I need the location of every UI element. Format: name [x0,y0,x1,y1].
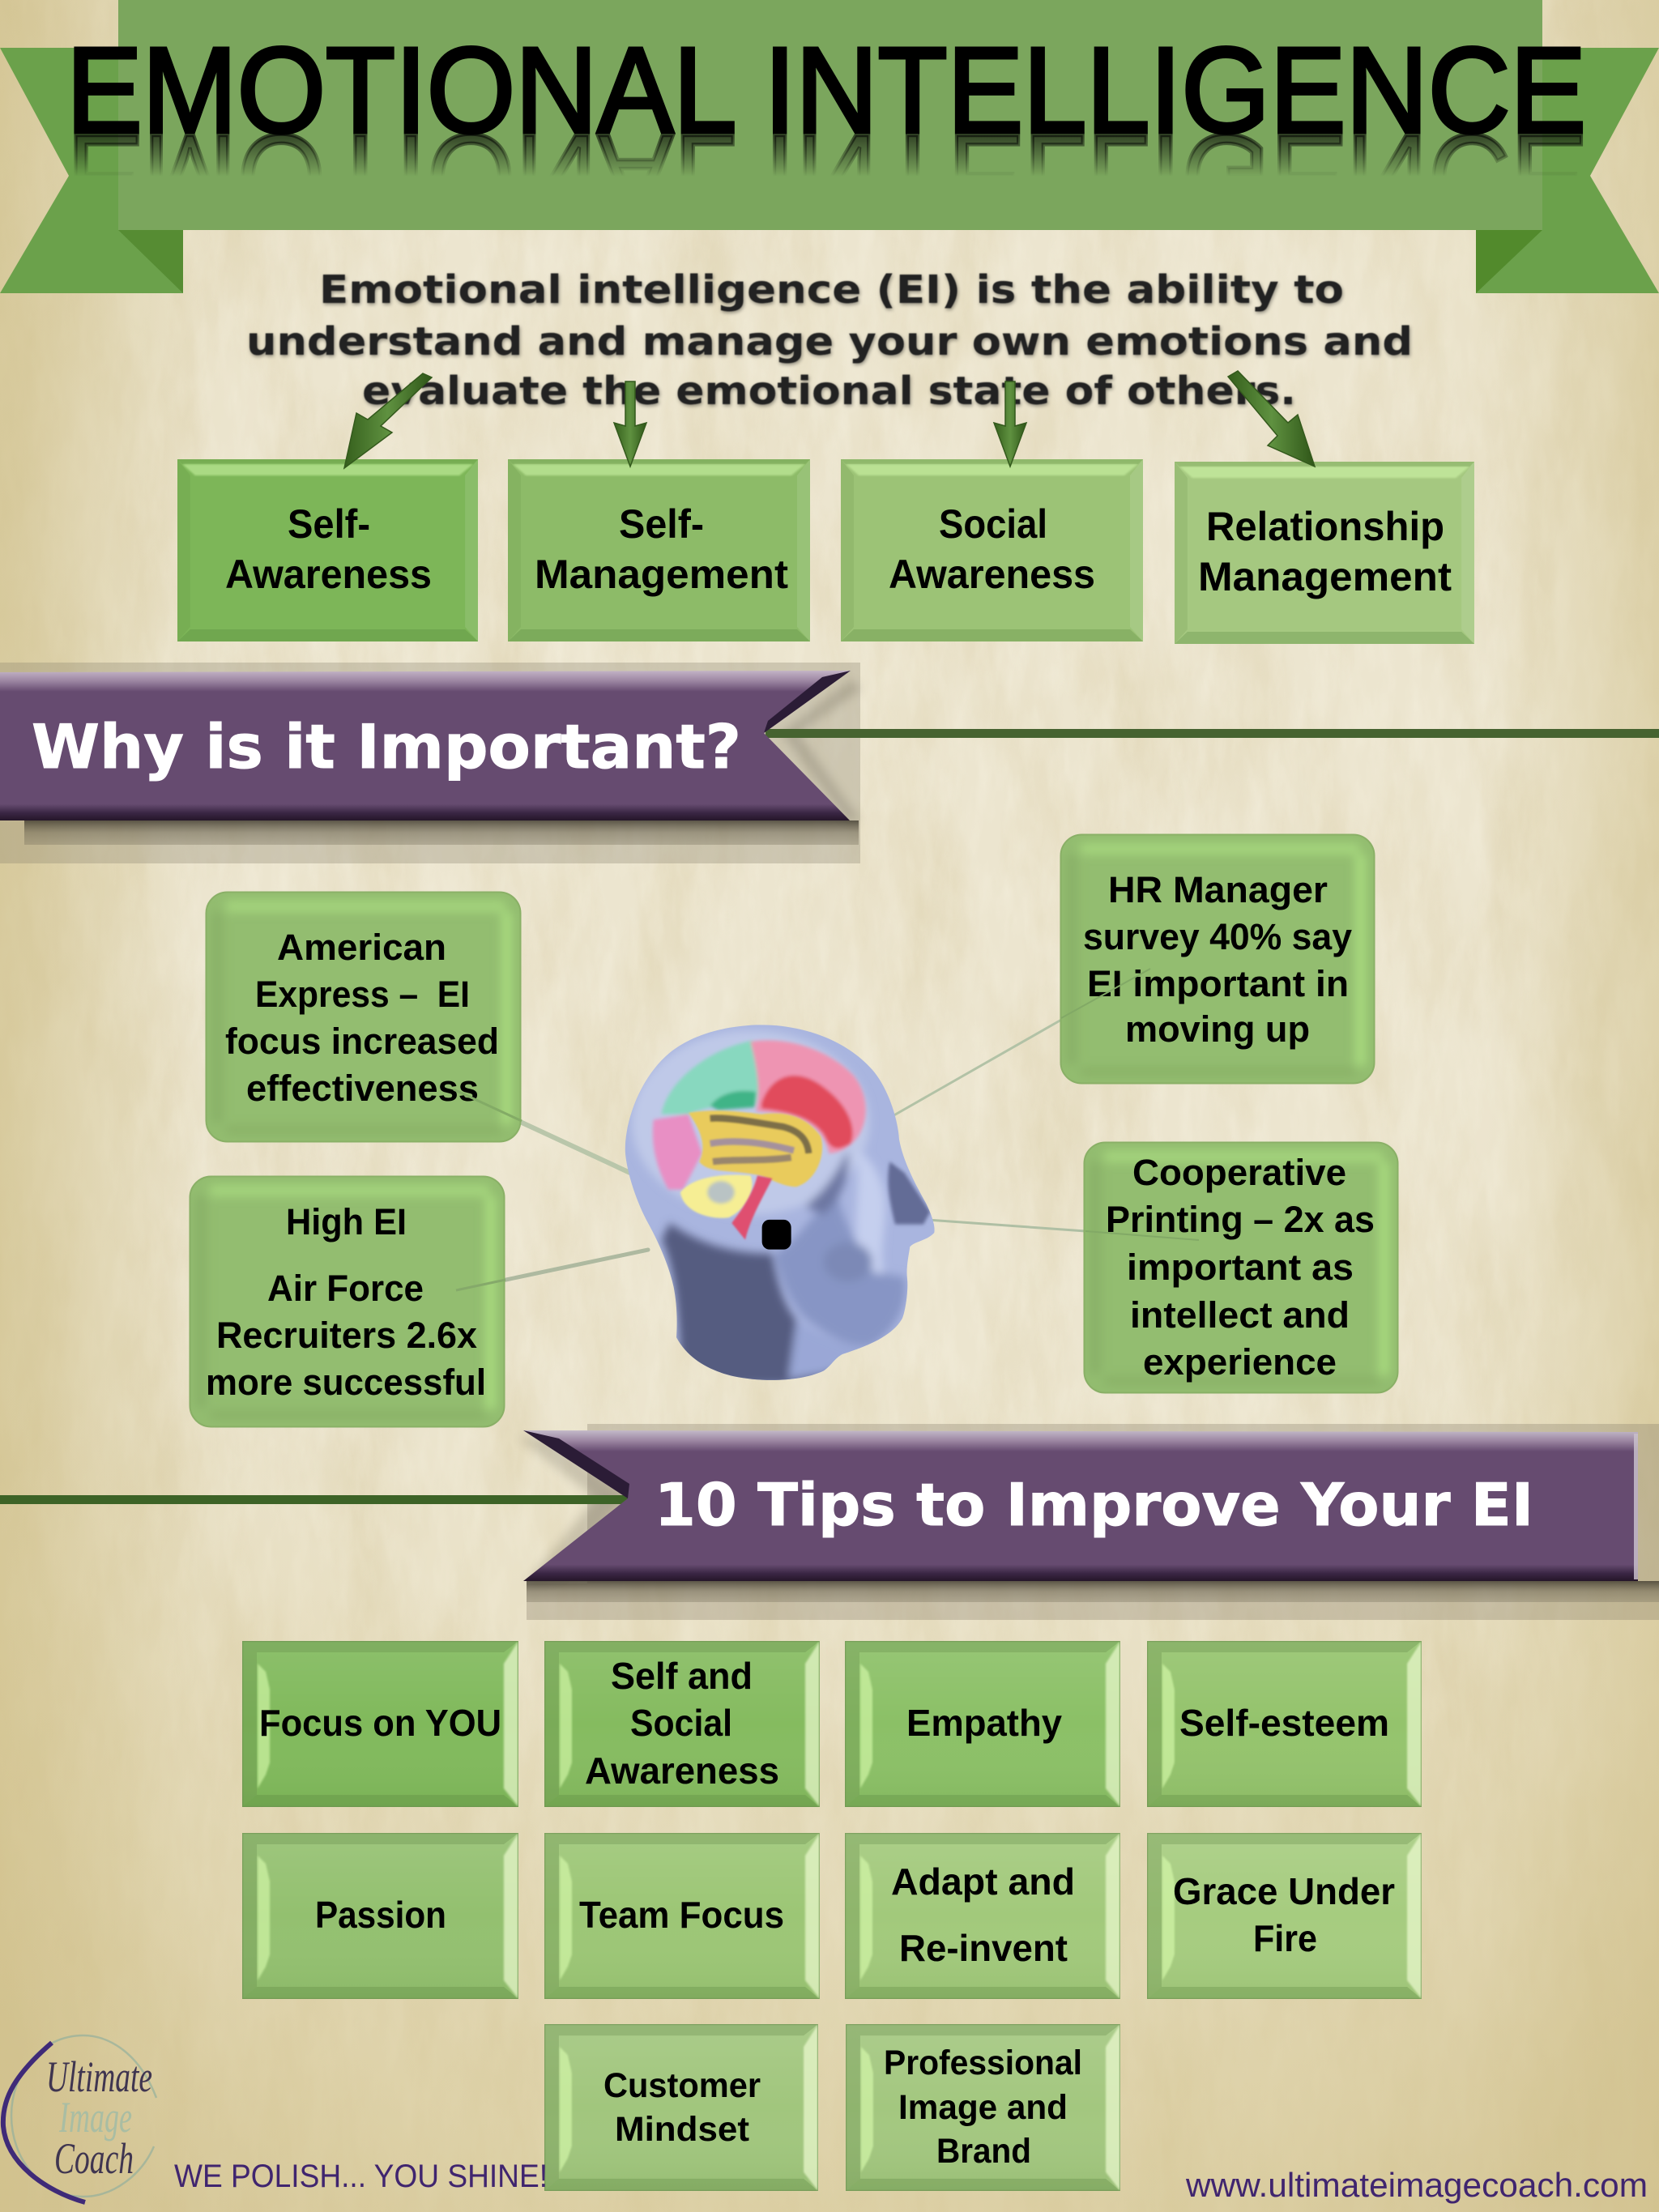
green deep [710,1091,756,1110]
title [66,22,1586,245]
box: relationship management: Relationship [1206,504,1444,549]
logo thick arc [3,2043,85,2202]
tip: Professional Image and Brand: Brand [936,2132,1031,2171]
temple shadow [804,1150,848,1215]
tip: Focus on YOU: Focus on YOU [259,1702,501,1744]
tip: Self and Social Awareness: Awareness [585,1750,779,1792]
callout: Cooperative Printing: experience [1143,1341,1337,1383]
title ribbon [0,0,1659,293]
callout: HR manager survey: survey 40% say [1083,916,1352,957]
tip: Professional Image and Brand [846,2024,1120,2191]
yellow cortex [689,1110,822,1187]
callout: HR manager survey: EI important in [1087,963,1349,1004]
ribbon left tail [0,48,183,293]
tip: Focus on YOU [242,1641,518,1807]
eye socket dark [888,1161,930,1225]
box: self-management [508,459,810,641]
callout: Cooperative Printing: important as [1127,1247,1354,1288]
callout: HR manager survey: moving up [1125,1008,1310,1050]
line to Cooperative box [928,1220,1085,1231]
callout: Cooperative Printing [1084,1143,1398,1392]
neck shadow [662,1223,834,1385]
green lobe [662,1040,759,1115]
website: www.ultimateimagecoach.com [1185,2166,1648,2204]
banner shape [0,671,851,820]
arrows from definition to domains [344,371,1315,468]
arrow 4 [1228,371,1315,467]
box: relationship management: Management [1198,554,1452,599]
green rule [766,729,1659,738]
pink lobe [751,1040,866,1153]
callout: Air Force: Recruiters 2.6x [216,1315,477,1356]
box: social awareness: Social [939,501,1047,547]
tip: Team Focus: Team Focus [579,1894,784,1936]
tip: Self and Social Awareness: Social [630,1702,732,1744]
tip: Self-esteem: Self-esteem [1179,1702,1389,1744]
title reflection: EMOTIONAL INTELLIGENCE [66,109,1586,245]
callout: Cooperative Printing: Printing – 2x as [1106,1199,1375,1240]
callout: Air Force [190,1177,505,1426]
banner shadow [518,1424,1659,1620]
tip: Customer Mindset [544,2024,818,2191]
banner shape [523,1430,1638,1581]
arrow 1 [344,373,432,468]
tip: Self and Social Awareness: Self and [611,1655,753,1697]
callout: Air Force: High EI [286,1201,407,1242]
callout: Air Force: more successful [206,1362,486,1403]
tip: Professional Image and Brand: Professional [884,2044,1082,2082]
notch dark edge [523,1430,629,1498]
callout: Air Force: Air Force [267,1268,424,1309]
tip: Passion [242,1833,518,1999]
section banner: why is it important [0,663,1659,863]
tip: Customer Mindset: Mindset [615,2110,749,2149]
logo wordmark: Image [58,2093,132,2142]
tip: Grace Under Fire: Fire [1253,1917,1317,1959]
ribbon right fold [1476,230,1542,293]
box: self-management: Management [535,552,788,597]
tip: Grace Under Fire: Grace Under [1173,1870,1395,1912]
box: social awareness: Awareness [889,552,1095,597]
section banner: 10 tips [0,1424,1659,1620]
intro definition text: understand and manage your own emotions and [246,319,1413,364]
box: self-awareness: Awareness [225,552,432,597]
tip: Grace Under Fire [1147,1833,1422,1999]
callout: HR manager survey [1060,834,1375,1084]
right bevel [1634,1434,1638,1579]
cranium glass [632,1030,869,1215]
connector lines [502,1019,1085,1281]
title: EMOTIONAL INTELLIGENCE [66,22,1586,158]
callout: American Express [206,893,522,1142]
cheek texture [824,1242,872,1281]
callout: HR manager survey: HR Manager [1108,869,1328,910]
banner shadow [0,663,862,863]
callout: American Express: American [277,927,446,968]
callout: Cooperative Printing: Cooperative [1132,1152,1346,1193]
tagline: WE POLISH... YOU SHINE! [174,2159,548,2194]
line to Air Force box [502,1250,648,1281]
ribbon left fold [118,230,183,293]
notch dark edge [764,671,851,733]
line to American Express box [518,1121,632,1174]
brain stem [731,1175,772,1240]
black dot [762,1220,791,1250]
green rule [0,1495,632,1504]
rear pink lobe [653,1115,702,1190]
tip: Empathy [845,1641,1120,1807]
tip: Customer Mindset: Customer [603,2066,761,2105]
ribbon right tail [1476,48,1659,293]
cerebellum [680,1175,752,1218]
tip: Adapt and Re-invent [845,1833,1120,1999]
intro definition text: Emotional intelligence (EI) is the ability to [319,267,1344,313]
tip: Team Focus [544,1833,820,1999]
intro definition text: evaluate the emotional state of others. [362,369,1296,414]
jaw and face shade [775,1196,906,1346]
logo thin ring [11,2035,156,2197]
callout: American Express: focus increased [225,1021,499,1062]
panel: ten tips grid [242,1641,1422,2191]
callout: Cooperative Printing: intellect and [1130,1294,1350,1336]
tip: Empathy: Empathy [906,1702,1062,1744]
tip: Professional Image and Brand: Image and [898,2088,1068,2127]
box: self-awareness: Self- [288,501,370,547]
cerebellum core [707,1181,735,1204]
box: self-awareness [177,459,478,641]
logo wordmark: Ultimate [46,2052,152,2101]
cortex dark folds [710,1119,808,1161]
logo wordmark: Coach [54,2134,134,2183]
logo wordmark [46,2052,152,2183]
callout: American Express: effectiveness [246,1068,479,1109]
arrow 3 [994,381,1026,467]
heading: Why is it Important? [32,711,741,782]
red deep [761,1076,853,1149]
intro definition text [246,267,1413,414]
callout: American Express: Express – EI [255,974,470,1015]
skull cheek light [856,1150,885,1274]
box: relationship management [1175,462,1474,644]
heading: 10 Tips to Improve Your EI [655,1471,1533,1539]
icon: head with brain [625,1025,935,1380]
tip: Passion: Passion [315,1894,446,1936]
ribbon main panel [118,0,1542,230]
tip: Self and Social Awareness [544,1641,820,1807]
brain regions [653,1040,866,1190]
arrow 2 [614,381,646,467]
line to HR box [891,1019,1063,1117]
tip: Adapt and Re-invent: Adapt and [891,1860,1075,1903]
head silhouette and shading [625,1025,935,1380]
tip: Adapt and Re-invent: Re-invent [899,1927,1068,1969]
jaw lower [788,1320,869,1379]
tip: Self-esteem [1147,1641,1422,1807]
logo: Ultimate Image Coach [3,2035,156,2202]
box: social awareness [841,459,1143,641]
box: self-management: Self- [619,501,704,547]
panel: four EI domains [177,459,1474,644]
